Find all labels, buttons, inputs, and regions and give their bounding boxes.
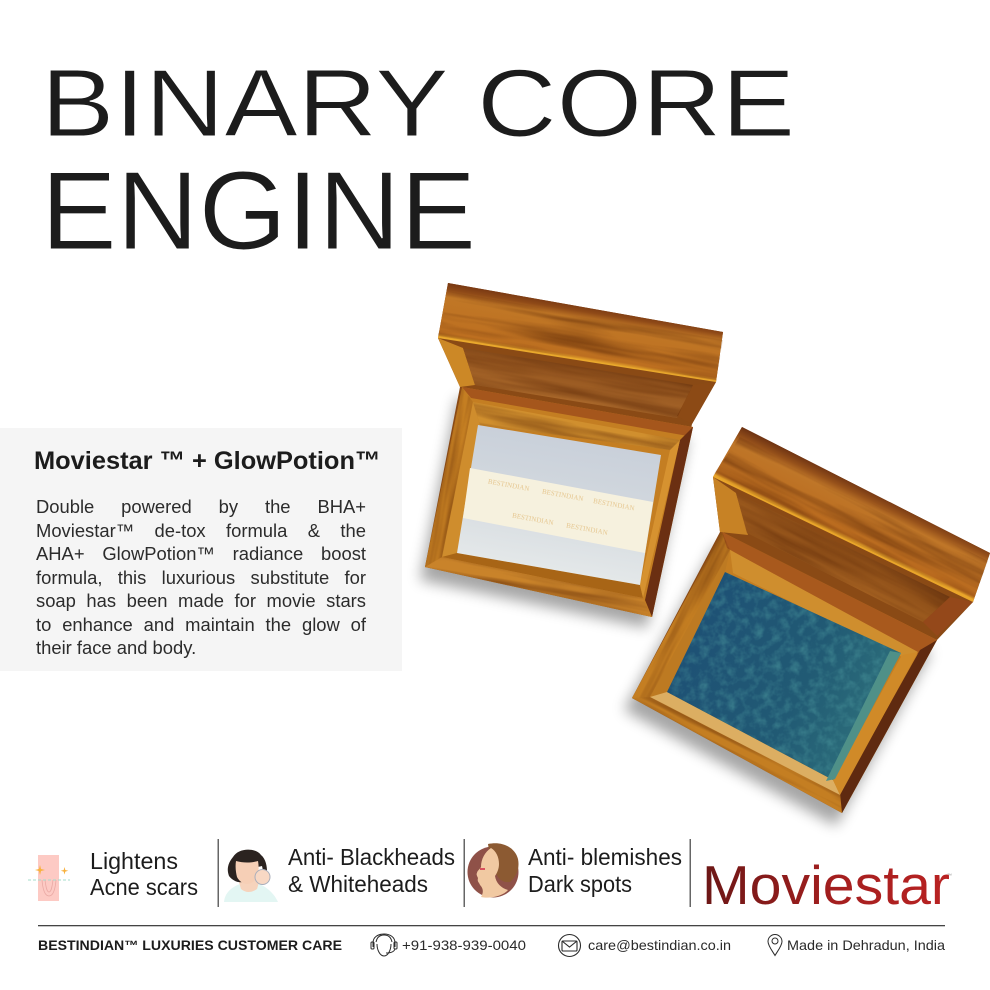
photo: wooden box with wrapped soap — [369, 240, 779, 668]
soap: paper wrapped bar: BESTINDIAN — [511, 511, 554, 527]
icon: location pin — [768, 934, 782, 956]
title: BINARY CORE — [41, 50, 795, 157]
panel body text: their face and body. — [36, 637, 196, 658]
panel body text: formula, this luxurious substitute for — [36, 566, 366, 588]
soap: paper wrapped bar: BESTINDIAN — [592, 497, 635, 512]
logo: Moviestar: ™ — [947, 873, 952, 879]
panel body text: AHA+ GlowPotion™ radiance boost — [36, 543, 366, 564]
footer label: BESTINDIAN™ LUXURIES CUSTOMER CARE — [38, 938, 342, 953]
panel body text: Double powered by the BHA+ — [36, 496, 366, 517]
text: anti blemishes dark spots — [528, 844, 682, 897]
panel body text: Moviestar™ de-tox formula & the — [36, 520, 366, 540]
text: location: Made in Dehradun, India — [787, 937, 945, 953]
icon: lightened skin — [28, 855, 70, 901]
title: ENGINE — [41, 149, 476, 270]
soap: paper wrapped bar — [457, 425, 661, 585]
icon: woman with blackheads — [224, 850, 278, 902]
text: lightens acne scars: Acne scars — [90, 874, 198, 900]
panel heading: Moviestar ™ + GlowPotion™ — [34, 447, 380, 475]
text: anti blackheads and whiteheads — [288, 844, 455, 897]
soap: paper wrapped bar: BESTINDIAN — [541, 487, 584, 503]
photo: wooden box with blue soap — [480, 293, 990, 957]
title — [41, 50, 795, 270]
icon: headset — [371, 934, 397, 956]
text: anti blemishes dark spots: Dark spots — [528, 871, 632, 897]
panel body text: soap has been made for movie stars — [36, 590, 366, 611]
icon: woman with blemishes — [468, 843, 519, 898]
soap: blue bar — [667, 572, 901, 781]
text: anti blemishes dark spots: Anti- blemishes — [528, 844, 682, 870]
soap: paper wrapped bar: BESTINDIAN — [566, 521, 608, 537]
panel body text: to enhance and maintain the glow of — [36, 614, 366, 634]
text: email: care@bestindian.co.in — [588, 937, 731, 953]
panel: product description — [0, 428, 402, 671]
text: anti blackheads and whiteheads: Anti- Blackheads — [288, 844, 455, 870]
logo: Moviestar: Moviestar — [702, 854, 950, 916]
icon: email — [558, 934, 580, 956]
soap: paper wrapped bar: BESTINDIAN — [487, 477, 530, 493]
text: lightens acne scars: Lightens — [90, 848, 178, 874]
text: phone: +91-938-939-0040 — [402, 937, 526, 953]
text: anti blackheads and whiteheads: & Whiteheads — [288, 871, 428, 897]
panel body text — [36, 496, 366, 658]
text: lightens acne scars — [90, 848, 198, 900]
